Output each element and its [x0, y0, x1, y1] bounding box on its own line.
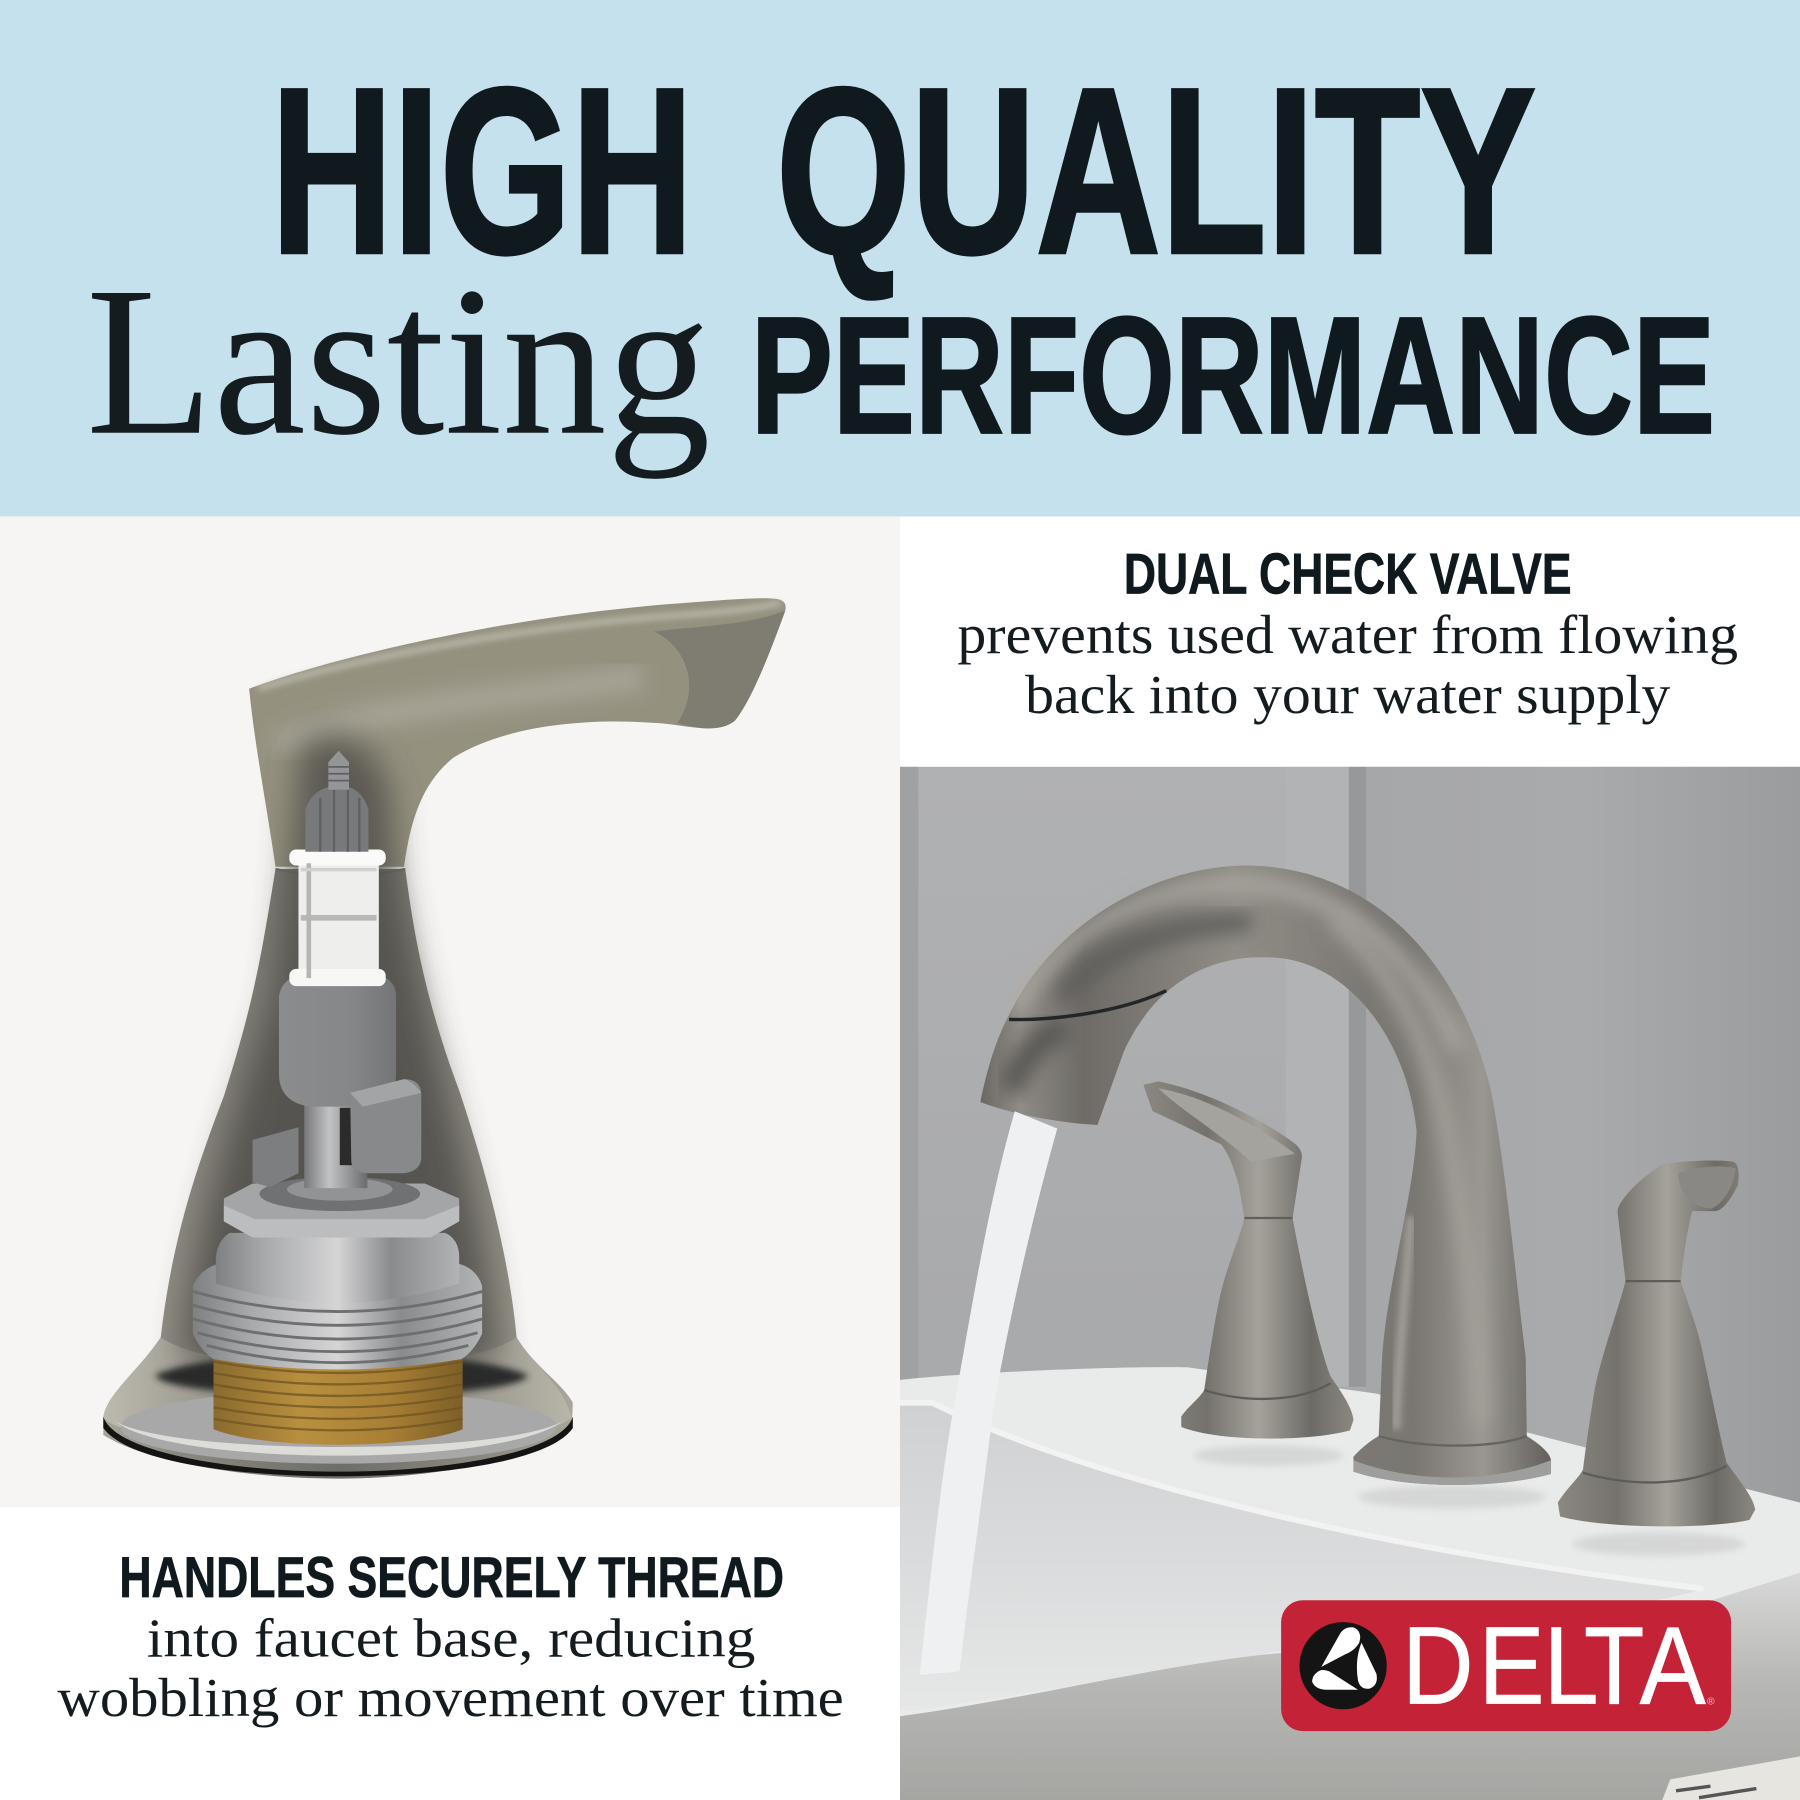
logo: delta	[1281, 1600, 1731, 1731]
caption heading: DUAL CHECK VALVE	[1124, 542, 1572, 606]
sink basin	[900, 1403, 1704, 1710]
subtitle: lasting: Lasting	[86, 244, 711, 480]
faucet reflections	[1194, 1445, 1745, 1555]
caption line 2: back into your water supply	[1025, 664, 1671, 725]
caption line 1: into faucet base, reducing	[147, 1608, 755, 1669]
water stream	[920, 1111, 1057, 1675]
valve cylinder	[216, 1233, 459, 1303]
faucet: right handle	[1558, 1161, 1755, 1526]
caption line 1: prevents used water from flowing	[957, 604, 1738, 665]
faucet: spout	[980, 866, 1551, 1485]
screw tip	[328, 751, 349, 790]
panel: handle cutaway	[0, 517, 900, 1507]
stem	[304, 1096, 367, 1188]
logo wordmark: DELTA	[1402, 1605, 1706, 1728]
cartridge	[121, 751, 557, 1464]
octagon collar	[224, 1184, 459, 1238]
towel corner	[1662, 1756, 1800, 1800]
metal threads	[193, 1264, 482, 1370]
splined cap	[305, 788, 368, 852]
faucet: left handle	[1143, 1081, 1353, 1439]
caption heading: HANDLES SECURELY THREAD	[119, 1546, 784, 1610]
sink front	[900, 1573, 1800, 1800]
small block	[253, 1127, 298, 1187]
white sleeve	[289, 849, 386, 986]
base rim	[103, 1417, 573, 1476]
gray sleeve	[279, 975, 396, 1107]
panel: handles caption	[0, 1507, 900, 1800]
handle shell	[103, 598, 786, 1479]
brass threads	[121, 1349, 557, 1464]
logo emblem	[1299, 1622, 1387, 1709]
title: quality: QUALITY	[776, 40, 1536, 304]
caption line 2: wobbling or movement over time	[57, 1667, 844, 1728]
title: high: HIGH	[271, 40, 693, 304]
interior shadow	[184, 736, 499, 1360]
panel: check valve caption	[900, 517, 1800, 767]
sink counter	[900, 1367, 1800, 1800]
registered mark: ®	[1707, 1697, 1715, 1708]
panel: faucet photo	[900, 767, 1800, 1800]
header band	[0, 0, 1800, 517]
